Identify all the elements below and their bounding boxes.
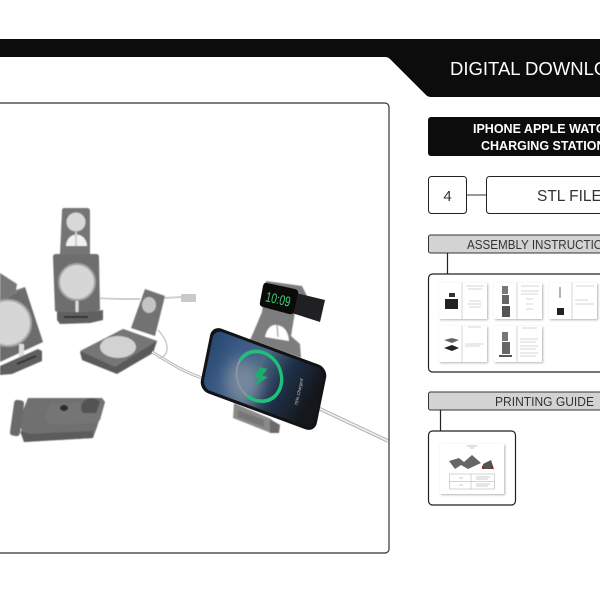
title box [428,117,600,156]
product: cable from upright stand [100,297,182,299]
watch band [292,293,325,322]
connector [467,194,486,196]
assembly panel [428,274,600,372]
page 5 [494,326,542,362]
product: tilted stand at left edge [0,273,43,375]
main product panel [0,103,389,553]
charging bolt [252,365,269,390]
file count [428,176,466,214]
file count: 4 [443,188,452,205]
printing guide panel [428,431,516,505]
page 4 [439,326,487,362]
stl files box [486,176,600,214]
page 1 [439,283,487,319]
stand behind phone [233,281,307,433]
product: main phone and watch on charging stand [152,281,388,441]
connector [446,253,448,274]
printing guide heading [428,392,600,410]
charging ring [232,345,286,408]
cable behind phone [152,330,388,441]
product: cable connector [181,294,196,302]
product: flat base stand [10,398,105,442]
phone [199,325,328,433]
guide page [440,444,504,494]
printing guide heading: PRINTING GUIDE [495,394,594,409]
product: flat folded stand [80,289,165,374]
watch: 10:09 [264,288,292,310]
assembly heading [428,235,600,253]
product: upright stand [53,208,103,324]
watch [260,283,298,314]
connector [440,410,442,431]
page 2 [494,283,542,319]
charge status: 75% Charged [294,377,304,406]
header banner [0,39,600,97]
page 3 [549,283,597,319]
